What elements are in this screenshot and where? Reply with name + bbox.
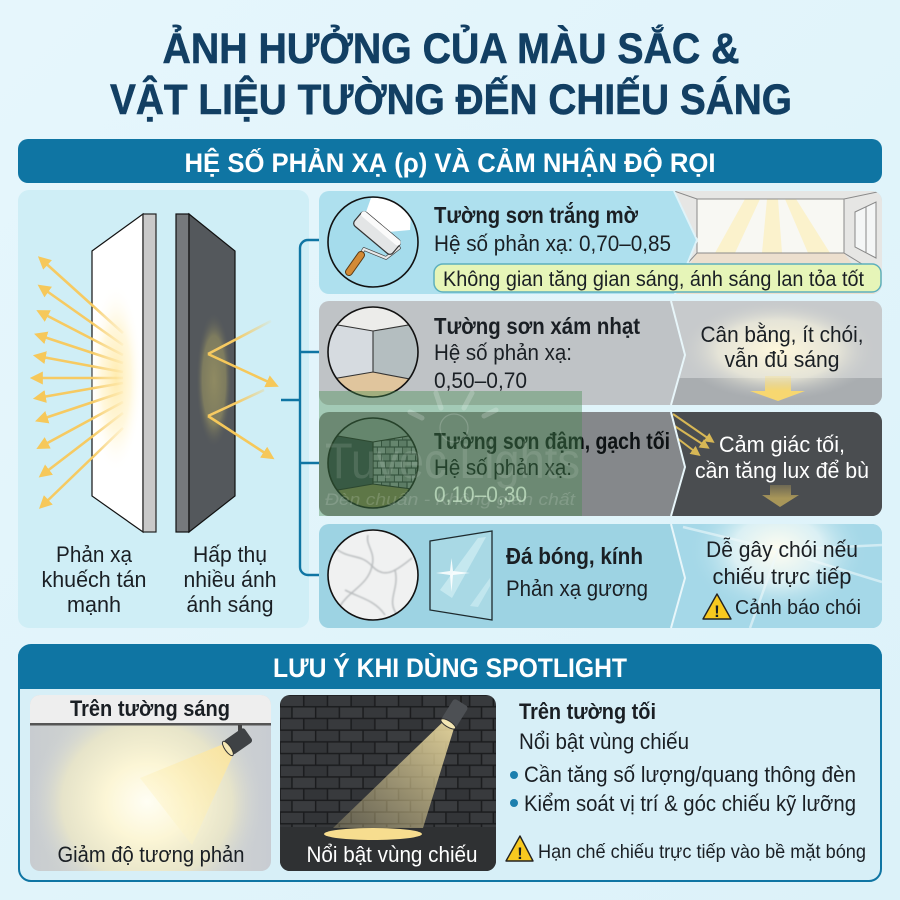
heading and value: Hệ số phản xạ: — [434, 455, 572, 480]
light wall heading: Trên tường sáng — [70, 696, 230, 721]
caption: highlighted area: Nổi bật vùng chiếu — [306, 842, 478, 867]
dark panel — [670, 412, 885, 516]
heading and description: Đá bóng, kính — [506, 543, 643, 569]
effect text — [700, 322, 864, 372]
icon: marble — [328, 530, 418, 620]
dark wall notes: Cần tăng số lượng/quang thông đèn — [524, 762, 856, 787]
effect text: vẫn đủ sáng — [724, 347, 840, 372]
heading and value — [434, 313, 640, 393]
caption: diffuse reflection: mạnh — [67, 592, 121, 617]
watermark: Tuvec Lights — [325, 433, 580, 489]
icon: spotlight — [440, 696, 468, 730]
effect text: Cân bằng, ít chói, — [700, 322, 864, 347]
heading and description — [506, 543, 648, 601]
effect text: cần tăng lux để bù — [695, 458, 869, 483]
heading and value: 0,50–0,70 — [434, 368, 527, 393]
panel: spotlight notes — [18, 645, 882, 900]
caption: absorption: Hấp thụ — [193, 542, 267, 567]
card: polished stone, glass — [319, 524, 882, 628]
illustration: dark wall absorbing — [176, 214, 275, 532]
heading and description: Phản xạ gương — [506, 576, 648, 601]
callout: effect: Không gian tăng gian sáng, ánh sáng lan tỏa tốt — [443, 268, 864, 291]
watermark: Đèn chuẩn - Không gian chất — [325, 490, 576, 509]
icon: warning: ! — [714, 602, 720, 621]
panel: light wall — [30, 695, 271, 871]
effect text — [695, 432, 869, 483]
heading and value: Tường sơn xám nhạt — [434, 313, 640, 339]
caption: absorption: ánh sáng — [186, 592, 274, 617]
panel: dark brick wall — [280, 695, 496, 871]
effect text: Cảm giác tối, — [719, 432, 845, 457]
title: VẬT LIỆU TƯỜNG ĐẾN CHIẾU SÁNG — [110, 75, 792, 124]
icon: warning: ! — [517, 844, 523, 863]
effect text — [706, 537, 858, 589]
effect text: chiếu trực tiếp — [712, 564, 852, 589]
card: light gray paint — [319, 300, 885, 406]
caption: diffuse reflection — [42, 542, 146, 617]
icon: spotlight — [221, 725, 253, 757]
heading and value: 0,10–0,30 — [434, 482, 527, 507]
icon: gray room — [326, 305, 420, 400]
illustration: white wall reflecting — [34, 214, 156, 532]
heading and value — [434, 428, 670, 507]
watermark — [319, 391, 582, 516]
heading and value — [434, 201, 671, 256]
glare panel — [682, 524, 882, 628]
caption: absorption — [184, 542, 276, 617]
icon: dark room with bricks — [326, 416, 420, 512]
icon: paint roller — [328, 197, 418, 287]
dark wall notes: Nổi bật vùng chiếu — [519, 729, 689, 754]
caption: diffuse reflection: Phản xạ — [56, 542, 133, 567]
caption: diffuse reflection: khuếch tán — [42, 567, 146, 592]
section header: reflectance: HỆ SỐ PHẢN XẠ (ρ) VÀ CẢM NHẬN ĐỘ RỌI — [184, 146, 716, 178]
section header: reflectance — [18, 139, 882, 183]
icon: warning — [703, 594, 731, 621]
title — [110, 24, 792, 124]
icon: glass pane — [430, 531, 492, 620]
glare warning label: Cảnh báo chói — [735, 597, 861, 619]
heading and value: Hệ số phản xạ: — [434, 340, 572, 365]
warning note: Hạn chế chiếu trực tiếp vào bề mặt bóng — [538, 841, 866, 863]
dark wall notes: Trên tường tối — [519, 699, 656, 724]
title: ẢNH HƯỞNG CỦA MÀU SẮC & — [162, 24, 740, 73]
floor and glow panel — [670, 300, 885, 406]
caption: absorption: nhiều ánh — [184, 567, 276, 592]
section header: spotlight — [18, 645, 882, 689]
heading and value: Tường sơn trắng mờ — [434, 201, 639, 228]
effect text: Dễ gây chói nếu — [706, 537, 858, 562]
icon: warning — [506, 836, 533, 863]
panel: wall comparison — [18, 190, 309, 628]
section header: spotlight: LƯU Ý KHI DÙNG SPOTLIGHT — [273, 652, 627, 683]
room image — [670, 191, 885, 295]
heading and value: Hệ số phản xạ: 0,70–0,85 — [434, 231, 671, 256]
card: matte white paint — [319, 191, 885, 295]
caption: reduced contrast: Giảm độ tương phản — [58, 842, 244, 867]
connector bracket — [281, 240, 320, 575]
heading and value: Tường sơn đậm, gạch tối — [434, 428, 670, 454]
dark wall notes: Kiểm soát vị trí & góc chiếu kỹ lưỡng — [524, 791, 856, 816]
card: dark paint, dark brick — [319, 412, 885, 516]
dark wall notes — [510, 699, 856, 816]
